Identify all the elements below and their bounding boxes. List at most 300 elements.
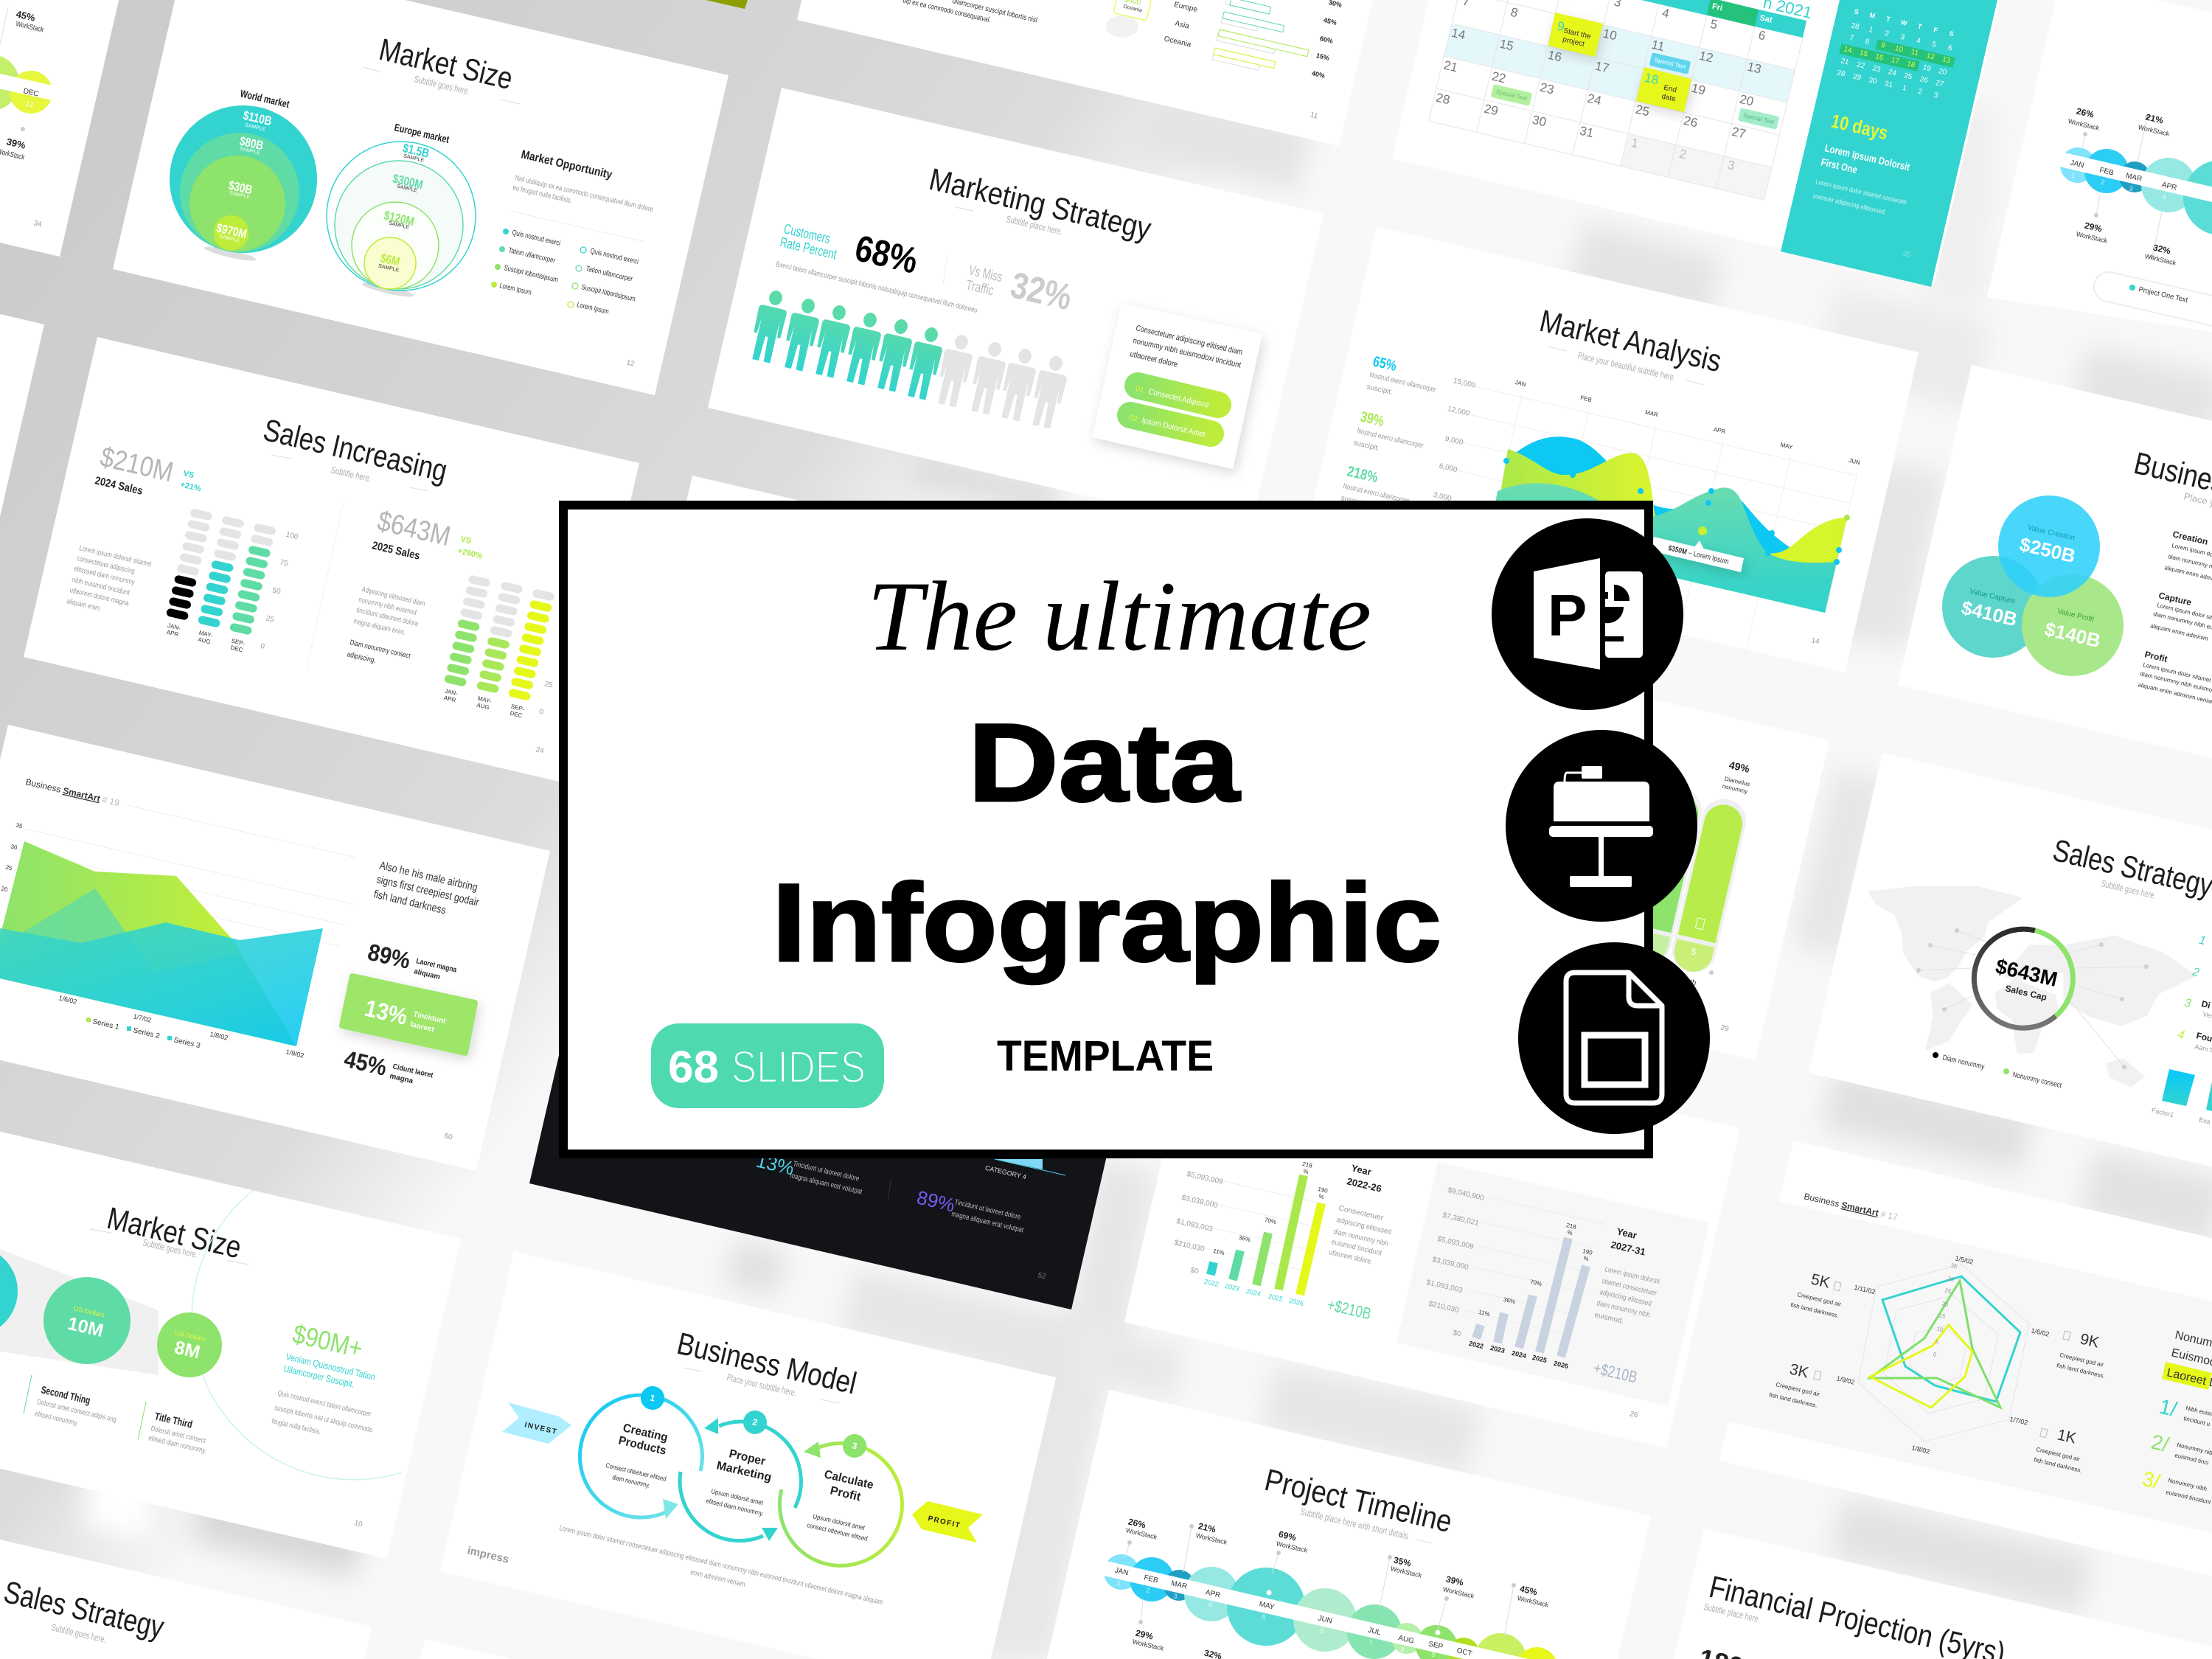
calendar day numbers: 4 [1660, 6, 1671, 21]
europe market outlined circles: Europe market [393, 121, 451, 145]
numbered list fragment: 4 [2177, 1029, 2185, 1042]
teal sidebar: Lorem Ipsum Dolorsit [1823, 142, 1911, 173]
side stats: suscipit. [1366, 383, 1394, 397]
teal sidebar: 5 [1931, 41, 1938, 49]
right chart notes: diam nonummy nibh [1596, 1299, 1651, 1320]
colored bar chart: % [1318, 1193, 1324, 1200]
special text tags: Special Text [1742, 112, 1775, 125]
pill bar chart 2025: 0 [538, 708, 544, 717]
labels: 34 [32, 219, 43, 229]
calendar header band [1641, 0, 1814, 38]
calendar day numbers: 2 [1678, 147, 1688, 161]
radar chart: 1/7/02 [2009, 1415, 2028, 1427]
area chart: MAY [1780, 442, 1794, 451]
radar chart: 20 [1941, 1301, 1950, 1309]
milestones: 69% [1278, 1528, 1298, 1543]
2025 figures: tincidunt utlaoreet dolore [355, 606, 420, 628]
badge: 68 slides [651, 1023, 884, 1108]
2024 figures: VS [182, 469, 195, 480]
radar chart: 5 [1935, 1338, 1940, 1346]
calendar day numbers: 5 [1709, 17, 1719, 32]
card with buttons: Consectetuer adipiscing elitised diam [1135, 324, 1243, 357]
milestones: WorkStack [1390, 1565, 1423, 1579]
slide: Marketing Strategy [708, 88, 1324, 534]
market opportunity text: eu feugiat nulla facilisis. [512, 184, 573, 205]
month bubbles: SEP [1427, 1640, 1444, 1652]
statement and stats: magna [389, 1072, 414, 1085]
radar chart: 1/11/02 [1854, 1284, 1876, 1295]
statement and stats: 45% [341, 1046, 389, 1081]
2025 figures: +290% [456, 546, 484, 561]
milestones: WorkStack [1125, 1526, 1158, 1541]
circle cluster [0, 55, 59, 114]
radar chart: 0 [1933, 1351, 1938, 1358]
grey bar chart: $3,039,000 [1431, 1256, 1470, 1272]
colored bar chart: $5,093,009 [1186, 1170, 1224, 1186]
teal sidebar: 1 [1902, 84, 1907, 93]
paragraph: utlaoreet dolore magna [69, 586, 130, 608]
area chart: FEB [1579, 394, 1593, 403]
market opportunity legend: Tation ullamcorper [585, 265, 634, 284]
colored bar chart: 70% [1264, 1217, 1277, 1225]
sticky note: end: date [1660, 92, 1677, 104]
month bubbles: JAN [1114, 1567, 1129, 1577]
grey bar chart: 2024 [1511, 1349, 1527, 1360]
radar callouts: fish land darkness. [2034, 1456, 2083, 1474]
card with buttons [1092, 303, 1262, 469]
dark stats: Tincidunt ut laoreet dolore [792, 1160, 860, 1183]
right column notes: 3/ [2140, 1467, 2163, 1493]
left chart notes: diam nonummy nibh [1332, 1228, 1389, 1248]
teal sidebar: 22 [1856, 60, 1866, 71]
radar callouts: 1K [2056, 1426, 2078, 1447]
slide: Financial Projection [1674, 1528, 2212, 1659]
radar chart: 35 [1950, 1262, 1958, 1270]
right column notes: tincidunt u [2183, 1415, 2211, 1427]
colored bar chart: 2024 [1245, 1287, 1262, 1298]
right chart notes [1592, 1225, 1660, 1386]
teal sidebar: 17 [1891, 56, 1900, 66]
radar callouts: 3K [1788, 1360, 1810, 1382]
radar chart: 1/9/02 [1836, 1374, 1855, 1386]
slide: Market Size lower, page 10 [0, 1113, 461, 1559]
right chart notes: +$210B [1592, 1359, 1639, 1386]
legend: Series 1 [91, 1018, 120, 1032]
teal sidebar: S [1854, 7, 1860, 16]
teal sidebar: 3 [1933, 91, 1939, 100]
map fragment and callout: Oceania [1123, 4, 1143, 13]
funnel circles: US Dollars [174, 1329, 207, 1343]
labels: DEC [22, 87, 40, 99]
colored bar chart: 190 [1317, 1186, 1329, 1194]
sales cap ring: $643M [1994, 955, 2059, 991]
headline figure: Quis nostrud exerci tation ullamcorper [276, 1389, 372, 1419]
area chart: APR [1713, 426, 1726, 435]
teal sidebar: 12 [1926, 52, 1935, 61]
paragraph [66, 544, 152, 613]
funnel circles: 8M [173, 1337, 202, 1363]
calendar day numbers: 20 [1738, 92, 1755, 109]
map connectors [1916, 928, 2149, 1069]
colored bar chart: 2023 [1224, 1282, 1240, 1293]
pill bar labels: 49% [1728, 759, 1751, 775]
grey bar chart [1425, 1186, 1607, 1370]
heading: Subtitle goes here. [142, 1237, 199, 1260]
slide: Sales Strategy lower left: Sales Strategy [1, 1574, 167, 1644]
venn circles [1942, 495, 2124, 676]
value notes: aliquam enim adminim [2150, 622, 2209, 642]
milestones: 29% [1135, 1627, 1155, 1642]
grey bar chart: 2026 [1553, 1360, 1569, 1370]
colored bar chart: 2022 [1203, 1278, 1220, 1288]
heading: Subtitle goes here. [2100, 877, 2157, 901]
market opportunity text: Nisl utaliquip ex ea commodo consequatvel illum dolore [514, 174, 654, 214]
numbered list fragment: 3 [2183, 997, 2192, 1010]
heading: Place your beautiful subtitle here. [1576, 349, 1677, 383]
card with buttons: 02 [1128, 414, 1138, 424]
card with buttons: 01 [1135, 385, 1145, 395]
special text tags: Special Text [1654, 57, 1687, 70]
teal sidebar [1781, 0, 1997, 287]
grey bar chart: $9,040,900 [1447, 1186, 1485, 1203]
heading: Market Size [104, 1200, 245, 1265]
headline figure [271, 1318, 377, 1436]
cycle ring 2: Marketing [715, 1459, 773, 1484]
right column notes: Nonummy nibh [2168, 1477, 2208, 1492]
slide: Business SmartArt 19, page 60: 60 [443, 1132, 453, 1142]
slide: Sales Increasing, page 24: 24 [535, 745, 545, 756]
right chart notes: Year [1615, 1225, 1638, 1241]
market opportunity text [509, 148, 654, 242]
right chart notes: Lorem ipsum dolorsit [1604, 1265, 1660, 1286]
2025 figures [346, 506, 484, 665]
calendar day numbers: 31 [1579, 124, 1595, 140]
area chart [1433, 377, 1861, 657]
slide: Market Size lower, page 10: 10 [353, 1519, 364, 1529]
highlighted date ranges [1444, 14, 1795, 200]
badge: 68 slides: SLIDES [731, 1042, 866, 1092]
icon: Google Slides [1518, 942, 1710, 1134]
cycle ring 2: Upsum dolorsit amet [711, 1487, 764, 1506]
month bubbles: 4 [1207, 1601, 1213, 1608]
paragraph: Lorem ipsum dolorsit sitamet [78, 544, 152, 568]
slide: timeline, upper right [1987, 0, 2212, 347]
factor bars: Factor1 [2151, 1107, 2174, 1119]
teal sidebar: zoersuer adipiscing elitsossed. [1812, 192, 1887, 216]
milestones: WorkStack [1276, 1540, 1309, 1554]
slide: hidden behind cover panel [619, 476, 1234, 922]
slide: Sales Increasing, page 24 [24, 337, 639, 783]
cycle ring 2: 2 [751, 1416, 759, 1428]
teal sidebar: 19 [1922, 63, 1932, 73]
calendar day numbers: 6 [1757, 28, 1767, 44]
market opportunity legend: Suscipit lobortisipsum [580, 283, 636, 304]
month bubbles: 7 [1368, 1639, 1374, 1646]
pill bar chart 2024: JAN- [167, 622, 181, 631]
cycle ring 1 [580, 1386, 702, 1519]
slide: Business SmartArt 17 radar [1719, 1141, 2212, 1576]
teal sidebar: 6 [1947, 44, 1953, 53]
calendar header band: Fri [1711, 2, 1723, 13]
radar callouts: Creepiest god air [1775, 1381, 1820, 1398]
market opportunity legend: Suscipit lobortisipsum [503, 264, 559, 285]
traffic stat: Traffic [964, 277, 995, 299]
world market nested circles: SAMPLE [218, 234, 240, 244]
europe market outlined circles: $6M [379, 251, 401, 269]
special text tags [1491, 52, 1779, 130]
venn circles: Value Capture [1969, 588, 2016, 606]
notes: Title Third [153, 1410, 194, 1430]
2025 figures: adipiscing. [346, 650, 377, 665]
colored bar chart: $0 [1189, 1266, 1200, 1276]
sticky note: end [1636, 67, 1691, 112]
area chart: 25 [5, 864, 13, 872]
grey bar chart: 218 [1565, 1222, 1577, 1231]
pill bar chart 2024: SEP- [231, 638, 246, 647]
regional progress bars [1164, 0, 1343, 80]
labels: 39% [5, 136, 27, 151]
milestones: 29% [2084, 220, 2104, 234]
regional progress bars: Europe [1173, 1, 1198, 14]
heading: the ultimate: The ultimate [867, 562, 1371, 672]
world market nested circles: SAMPLE [239, 146, 261, 156]
europe market outlined circles: $120M [383, 209, 415, 229]
europe market outlined circles: $300M [392, 172, 424, 192]
slide: left sliver [0, 198, 44, 644]
milestones: WorkStack [1132, 1638, 1165, 1652]
milestones [2067, 105, 2177, 267]
left chart notes: adipiscing elitossed [1335, 1216, 1392, 1237]
teal sidebar: W [1900, 18, 1908, 27]
slide: Sales Strategy map [1809, 753, 2212, 1199]
teal sidebar: 2 [1917, 88, 1924, 97]
2024 figures: +21% [179, 480, 202, 493]
sales cap ring [1974, 929, 2073, 1028]
slide: Project Timeline [1047, 1390, 1651, 1659]
world market nested circles: $80B [238, 134, 265, 153]
dark stats: 13% [754, 1150, 796, 1180]
teal sidebar: 16 [1874, 52, 1885, 63]
calendar day numbers: 21 [1442, 58, 1459, 74]
heading: Project Timeline [1262, 1462, 1455, 1539]
statement and stats: fish land darkness [372, 888, 447, 917]
dark stats: 89% [915, 1186, 957, 1217]
regional progress bars: 40% [1311, 69, 1326, 80]
2025 figures: $643M [375, 506, 453, 552]
market opportunity legend: Lorem Ipsum [498, 282, 532, 297]
notes: elitsed diam nonummy. [147, 1434, 207, 1455]
notes: Second Thing [40, 1383, 91, 1406]
factor bars [2151, 1069, 2212, 1126]
calendar day numbers: 8 [1509, 5, 1520, 20]
teal sidebar: 35 [1902, 249, 1912, 260]
2025 figures: nonummy nibh euismod [358, 596, 417, 617]
calendar day numbers: 24 [1586, 91, 1603, 108]
milestones: 21% [1197, 1520, 1217, 1535]
radar chart [1836, 1254, 2050, 1455]
calendar day numbers: 15 [1498, 37, 1515, 53]
2024 figures: 2024 Sales [94, 474, 144, 498]
dark stats: 52 [1037, 1271, 1047, 1281]
venn circles: $250B [2017, 533, 2078, 567]
cycle ring 1: Products [617, 1434, 667, 1458]
teal sidebar: 23 [1871, 64, 1882, 74]
factor bars: Exa [2198, 1116, 2211, 1126]
slide: Business SmartArt 19, page 60 [0, 725, 550, 1171]
sticky note: start: Start the [1562, 27, 1592, 41]
grey bar chart: $0 [1452, 1329, 1462, 1339]
calendar day numbers [1435, 0, 1767, 173]
calendar day numbers: 19 [1690, 81, 1707, 98]
market opportunity legend: Quis nostrud exerci [511, 229, 561, 248]
month bubbles: 3 [1172, 1593, 1178, 1600]
cycle ring 2: Proper [728, 1447, 767, 1468]
teal sidebar: T [1885, 15, 1891, 24]
slide: Market Analysis, page 14 [1303, 226, 1919, 672]
radar chart: 1/5/02 [1955, 1254, 1974, 1266]
heading: Sales Increasing [260, 412, 451, 488]
sales cap ring: Sales Cap [2004, 983, 2048, 1003]
sticky note: start [1548, 13, 1603, 57]
footer copy [466, 1524, 883, 1607]
area chart: 1/9/02 [285, 1048, 305, 1060]
grey bar chart: 2025 [1531, 1354, 1548, 1364]
pill bar chart 2024: APR [166, 629, 179, 638]
calendar day numbers: 23 [1539, 80, 1555, 97]
milestones: WorkStack [2076, 230, 2109, 245]
value notes: Lorem ipsum dolor sitamet [2143, 661, 2212, 684]
colored bar chart: 2025 [1267, 1293, 1284, 1303]
area chart: 1/6/02 [58, 994, 77, 1006]
milestones: WorkStack [2067, 117, 2101, 132]
right column notes: 2/ [2149, 1430, 2171, 1456]
month bubbles: APR [1205, 1588, 1221, 1600]
pill bar chart 2025: 25 [543, 680, 554, 690]
special text tags: Special Text [1495, 88, 1528, 102]
funnel circles [0, 1246, 222, 1377]
teal sidebar: 28 [1850, 21, 1860, 32]
side stats: 218% [1346, 463, 1380, 486]
heading: Subtitle place here with short details [1299, 1506, 1410, 1542]
grey bar chart: 36% [1503, 1296, 1516, 1305]
cycle ring 1: diam nonummy. [612, 1473, 650, 1489]
milestones: 39% [1445, 1573, 1465, 1588]
milestones: WorkStack [2144, 252, 2177, 267]
teal sidebar: 29 [1852, 72, 1863, 83]
cycle ring 3 [779, 1434, 902, 1565]
teal sidebar: 13 [1941, 55, 1952, 65]
paragraph: consectetuer adipiscing [76, 554, 136, 576]
2024 figures: $210M [97, 442, 176, 488]
chart callout [1651, 537, 1744, 572]
milestones: WorkStack [1442, 1585, 1475, 1600]
heading: Business SmartArt # 17 [1803, 1191, 1899, 1222]
project pill [2091, 269, 2212, 347]
radar callouts: Creepiest god air [2059, 1352, 2104, 1368]
radar callouts: fish land darkness. [1769, 1391, 1818, 1409]
month bubbles: 3 [2128, 185, 2134, 192]
sticky note: start: project [1562, 35, 1585, 49]
side stats: Nostrud exerci ullamcorper [1368, 371, 1437, 394]
statement and stats: Cidunt laoret [392, 1062, 434, 1080]
teal sidebar: M [1869, 11, 1876, 20]
left chart notes: euismod tincidunt [1330, 1238, 1382, 1258]
market opportunity legend: Quis nostrud exerci [589, 247, 639, 266]
grey bar chart: $5,093,009 [1436, 1235, 1475, 1251]
teal sidebar: 25 [1903, 72, 1913, 82]
venn circles: $140B [2042, 618, 2103, 652]
grey bar chart: $7,380,021 [1441, 1211, 1480, 1228]
side stats [1340, 353, 1437, 508]
cover panel [563, 505, 1649, 1154]
milestones: 45% [1519, 1583, 1539, 1598]
teal sidebar: 8 [1864, 38, 1871, 46]
milestones: WorkStack [2138, 123, 2171, 138]
map fragment and callout [1106, 0, 1152, 38]
slide: calendar, page 35 [1392, 0, 2008, 287]
customer stat: Customers [782, 221, 832, 247]
pill bar labels [1689, 759, 1751, 1034]
customer stat [775, 221, 978, 315]
headline figure: suscipit lobortis nisl ut aliquip commodo [274, 1404, 374, 1435]
grey bar chart: 190 [1582, 1248, 1593, 1256]
badge: 68 slides: 68 [668, 1042, 719, 1092]
pill bar chart 2024: 100 [285, 531, 299, 541]
slide: Market Size, page 12 [113, 0, 728, 395]
dark stats: CATEGORY 4 [984, 1164, 1027, 1180]
calendar day numbers: 29 [1483, 102, 1500, 118]
legend: Series 3 [173, 1036, 201, 1050]
pill bar labels: th [1689, 978, 1697, 987]
pill bar: green [1624, 784, 1706, 967]
area chart: 6,000 [1439, 462, 1458, 474]
slide: dark stats, page 52 [529, 863, 1145, 1310]
grey bar chart: % [1567, 1229, 1573, 1237]
venn circles: Value Profit [2056, 608, 2095, 624]
heading: Infographic: Infographic [772, 860, 1441, 984]
radar chart: 25 [1944, 1287, 1952, 1295]
month bubbles: 9 [1430, 1651, 1436, 1658]
value notes: Creation [2171, 529, 2209, 547]
customer stat: Rate Percent [779, 234, 838, 263]
pill bar chart 2025: SEP- [510, 703, 525, 713]
teal sidebar: S [1949, 29, 1955, 38]
world market nested circles: SAMPLE [244, 122, 266, 133]
teal sidebar: 9 [1880, 41, 1886, 50]
map legend: Diam nonummy [1941, 1054, 1985, 1071]
area chart: MAR [1644, 409, 1659, 418]
market opportunity legend [491, 229, 639, 316]
numbered list fragment: 1 [2198, 934, 2207, 947]
footer copy: Lorem ipsum dolor sitamet consectetuer adipiscing elitossed diam nonummy nibh euismod tincidunt utlaoreet dolore magna aliquam [558, 1524, 883, 1607]
pill bar chart 2024: 50 [271, 586, 282, 597]
grey bar chart: 2023 [1489, 1344, 1506, 1354]
sticky note: start: 9 [1556, 19, 1566, 34]
teal sidebar: 28 [1836, 69, 1846, 79]
colored bar chart: $210,030 [1173, 1239, 1206, 1253]
radar chart: 1/6/02 [2031, 1326, 2050, 1338]
world market nested circles: $110B [242, 108, 273, 129]
world map silhouette [1869, 887, 2195, 1086]
teal sidebar: 10 days [1829, 110, 1890, 144]
right column notes [2140, 1329, 2212, 1506]
people pictogram [747, 288, 1071, 430]
numbered list fragment [2177, 934, 2212, 1054]
venn circles: Value Creation [2027, 524, 2076, 543]
milestones: WorkStack [1517, 1594, 1550, 1609]
map legend [1933, 1052, 2062, 1090]
map legend: Nonummy consect [2011, 1071, 2062, 1090]
